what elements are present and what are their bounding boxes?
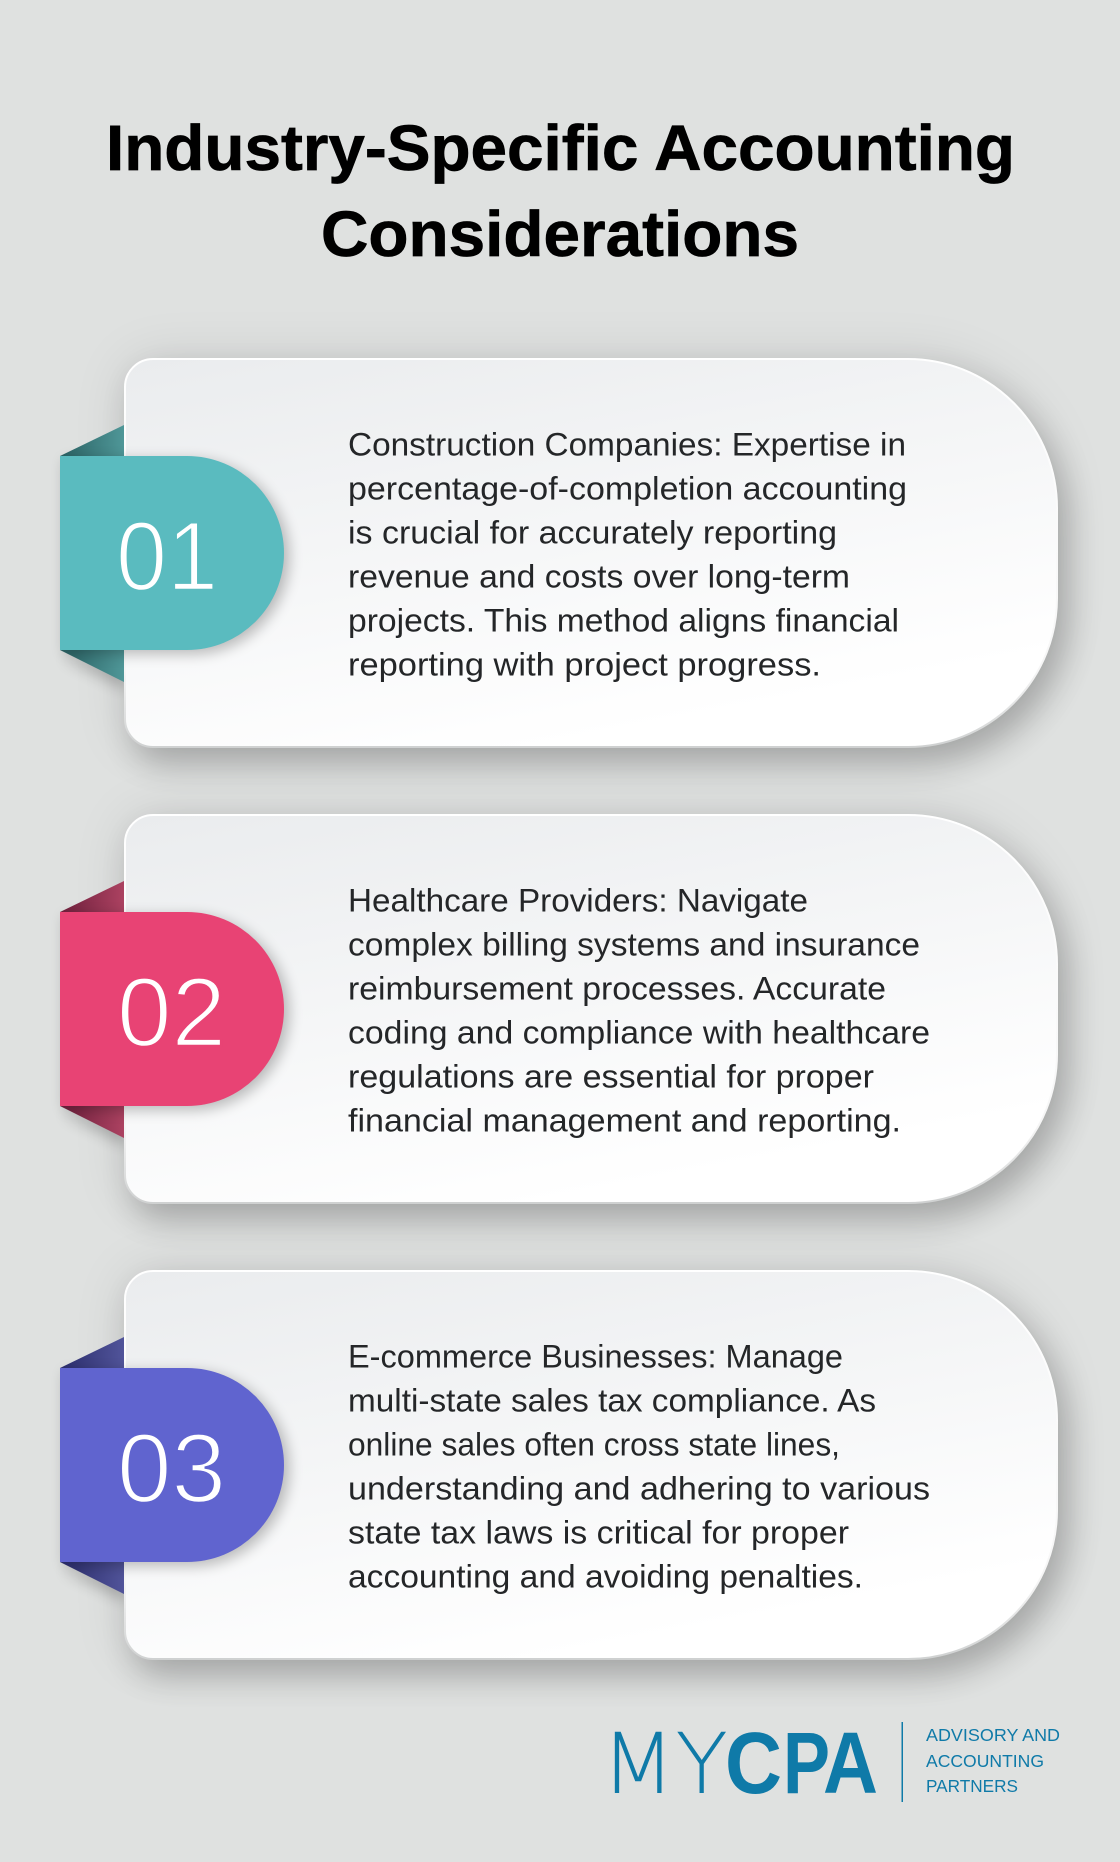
number badge 02: [60, 912, 289, 1110]
card text: is crucial for accurately reporting: [348, 514, 837, 550]
logo tagline: ADVISORY AND: [926, 1725, 1060, 1745]
logo divider: [902, 1722, 903, 1802]
ribbon fold: bottom: [60, 1106, 124, 1138]
logo wordmark: A: [823, 1715, 878, 1812]
card text: revenue and costs over long-term: [348, 558, 850, 594]
card text: multi-state sales tax compliance. As: [348, 1382, 876, 1418]
panel: construction companies: [60, 358, 1068, 764]
logo wordmark: P: [783, 1715, 830, 1812]
logo wordmark: C: [725, 1715, 782, 1812]
title: Considerations: [321, 198, 799, 270]
card text: E-commerce Businesses: Manage: [348, 1338, 843, 1374]
card body: [125, 359, 1057, 747]
number badge 01: [60, 456, 289, 654]
card text: state tax laws is critical for proper: [348, 1514, 849, 1550]
logo wordmark: MY: [601, 1715, 728, 1813]
card text: reporting with project progress.: [348, 646, 821, 682]
logo tagline: [926, 1725, 1060, 1796]
title: Industry-Specific Accounting: [106, 112, 1015, 184]
card text: financial management and reporting.: [348, 1102, 901, 1138]
card text: coding and compliance with healthcare: [348, 1014, 930, 1050]
ribbon fold: top: [60, 425, 124, 456]
logo tagline: PARTNERS: [926, 1776, 1018, 1796]
number badge 02: 02: [117, 957, 226, 1067]
logo tagline: ACCOUNTING: [926, 1751, 1044, 1771]
card text: accounting and avoiding penalties.: [348, 1558, 863, 1594]
title: [106, 112, 1015, 270]
number badge 03: [60, 1368, 289, 1566]
number badge 03: 03: [117, 1413, 226, 1523]
ribbon fold: bottom: [60, 650, 124, 682]
card text: complex billing systems and insurance: [348, 926, 920, 962]
ribbon fold: bottom: [60, 1562, 124, 1594]
card text: online sales often cross state lines,: [348, 1426, 840, 1462]
card text: understanding and adhering to various: [348, 1470, 930, 1506]
number badge 01: 01: [116, 501, 218, 611]
logo wordmark: [601, 1715, 878, 1813]
ribbon fold: top: [60, 881, 124, 912]
card body: [125, 1271, 1057, 1659]
panel: healthcare providers: [60, 814, 1068, 1220]
card text: [348, 1338, 930, 1594]
ribbon fold: top: [60, 1337, 124, 1368]
card text: projects. This method aligns financial: [348, 602, 899, 638]
card text: Healthcare Providers: Navigate: [348, 882, 808, 918]
card text: [348, 882, 930, 1138]
card body: [125, 815, 1057, 1203]
card text: reimbursement processes. Accurate: [348, 970, 886, 1006]
logo: MyCPA: [601, 1715, 1060, 1813]
card text: regulations are essential for proper: [348, 1058, 874, 1094]
panel: e-commerce businesses: [60, 1270, 1068, 1676]
card text: Construction Companies: Expertise in: [348, 426, 906, 462]
card text: percentage-of-completion accounting: [348, 470, 907, 506]
card text: [348, 426, 907, 682]
